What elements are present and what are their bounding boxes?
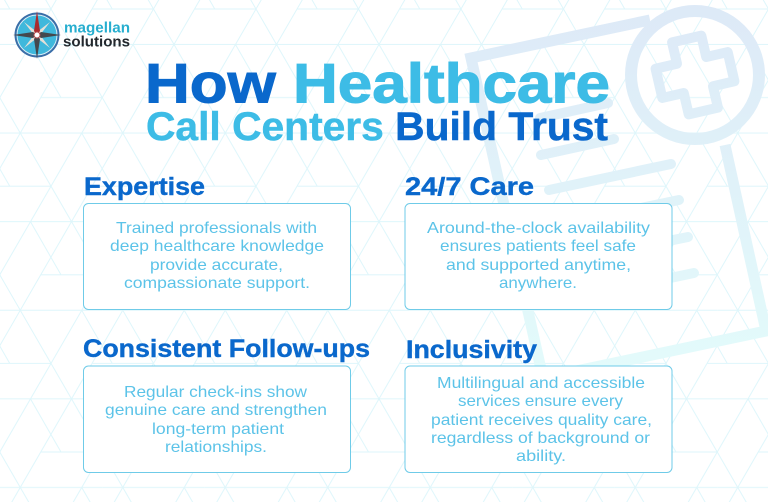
- text: inclusivity: [431, 375, 652, 465]
- logo: [13, 11, 130, 59]
- text: 24/7 care: Around-the-clock availability: [427, 220, 650, 237]
- text: inclusivity: Multilingual and accessible: [437, 375, 645, 392]
- heading: expertise: Expertise: [84, 173, 205, 201]
- text: 24/7 care: and supported anytime,: [446, 257, 631, 274]
- title: [145, 52, 610, 149]
- logo wordmark: [63, 20, 130, 50]
- panel: expertise: [84, 173, 350, 310]
- icon: medical document with magnifying glass: [471, 11, 766, 378]
- title: How Healthcare: [145, 52, 610, 114]
- text: inclusivity: ability.: [516, 448, 566, 465]
- text: consistent follow-ups: genuine care and strengthen: [105, 402, 327, 419]
- card: expertise: [84, 204, 350, 310]
- text: 24/7 care: ensures patients feel safe: [440, 238, 636, 255]
- icon: compass: [13, 11, 61, 59]
- text: expertise: Trained professionals with: [116, 220, 317, 237]
- text: consistent follow-ups: [105, 384, 327, 456]
- text: consistent follow-ups: relationships.: [165, 439, 267, 456]
- text: consistent follow-ups: long-term patient: [152, 421, 285, 438]
- text: expertise: provide accurate,: [150, 257, 283, 274]
- logo wordmark: solutions: [63, 34, 130, 50]
- text: expertise: [110, 220, 324, 292]
- text: consistent follow-ups: Regular check-ins show: [124, 384, 307, 401]
- text: inclusivity: patient receives quality care,: [431, 412, 652, 429]
- card: consistent follow-ups: [84, 366, 350, 472]
- text: expertise: deep healthcare knowledge: [110, 238, 324, 255]
- panel: consistent follow-ups: [83, 335, 370, 472]
- text: 24/7 care: [427, 220, 650, 292]
- heading: inclusivity: Inclusivity: [406, 336, 537, 364]
- text: inclusivity: services ensure every: [458, 393, 623, 410]
- text: expertise: compassionate support.: [124, 275, 310, 292]
- card: inclusivity: [405, 366, 672, 472]
- title: Call Centers Build Trust: [146, 105, 608, 149]
- card: 24/7 care: [405, 204, 672, 310]
- panel: inclusivity: [405, 336, 672, 472]
- heading: 24/7 care: 24/7 Care: [405, 173, 534, 201]
- logo wordmark: magellan: [64, 20, 130, 36]
- heading: consistent follow-ups: Consistent Follow-ups: [83, 335, 370, 363]
- text: 24/7 care: anywhere.: [499, 275, 577, 292]
- text: inclusivity: regardless of background or: [431, 430, 651, 447]
- panel: 24/7 care: [405, 173, 672, 310]
